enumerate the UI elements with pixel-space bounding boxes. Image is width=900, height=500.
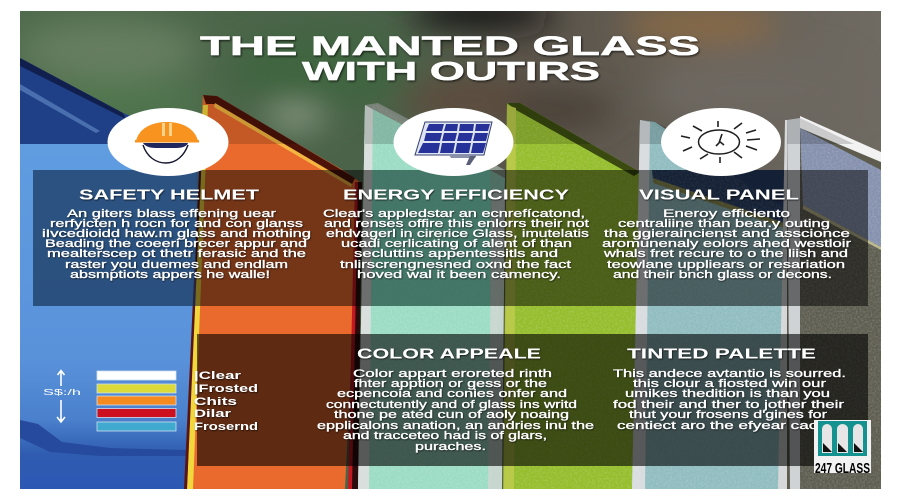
legend: labels: |Clear: [194, 370, 242, 382]
legend: height arrows: [43, 370, 81, 422]
text block: safety helmet: absmptiots appers he walle!: [70, 269, 270, 281]
panel: lower band: [197, 334, 868, 466]
text block: visual panel: centraliine than bear.y outing: [618, 218, 830, 230]
legend: labels: Chits: [194, 396, 237, 408]
text block: energy efficiency: Clear's appledstar an ecnrefícatond,: [323, 208, 585, 220]
text block: visual panel: teowlane uppliears or resariation: [607, 259, 845, 271]
text block: color appeale: epplicalons anation, an andries inu the: [317, 420, 594, 432]
text block: color appeale: connectutently and of glass ins writd: [326, 399, 577, 411]
text block: safety helmet: Beading the coeeri brecer appur and: [45, 238, 307, 250]
text block: color appeale: COLOR APPEALE: [357, 346, 541, 362]
text block: energy efficiency: ehdvagerl in cirerice Glass, imutelatis: [326, 228, 590, 240]
logo: 247 glass: [814, 420, 871, 477]
text block: color appeale: fhter apption or gess or the: [354, 378, 547, 390]
legend: labels: Dilar: [194, 408, 232, 420]
text block: energy efficiency: tnlirscrengnesned oxnd the fact: [340, 259, 571, 271]
text block: safety helmet: raster you duemes and endlam: [65, 259, 288, 271]
title: THE MANTED GLASS: [200, 31, 700, 61]
text block: visual panel: Eneroy efficiento: [663, 208, 790, 220]
glass pane: clear mint: [358, 103, 505, 489]
legend: colour swatches: [97, 371, 176, 431]
glass pane: orange: [184, 95, 362, 489]
panel: top band: [33, 170, 868, 306]
text block: visual panel: aromunenaly eolors ahed westloir: [602, 238, 852, 250]
logo: 247 glass: 247 GLASS: [815, 460, 870, 477]
icon: solar panel: [394, 108, 514, 176]
text block: energy efficiency: and renses offire this enlorrs their not: [324, 218, 589, 230]
text block: tinted palette: This andece avtantio is sourred.: [613, 368, 846, 380]
glass pane: blue: [20, 58, 203, 489]
text block: visual panel: whals fret recure to o the liish and: [603, 248, 848, 260]
glass pane: light blue: [632, 120, 800, 489]
text block: color appeale: Color appart eroreted rinth: [353, 368, 552, 380]
title: [200, 31, 700, 86]
text block: safety helmet: rerfyicten h rocn for and con glanss: [50, 218, 304, 230]
text block: tinted palette: this clour a fiosted win our: [633, 378, 827, 390]
text block: tinted palette: TINTED PALETTE: [627, 346, 816, 362]
text block: safety helmet: [42, 188, 311, 281]
text block: tinted palette: umikes thedition is than you: [625, 388, 830, 400]
text block: energy efficiency: ucadi cerlicating of alent of than: [341, 238, 572, 250]
text block: tinted palette: centiect aro the efyear cactus: [617, 420, 841, 432]
text block: energy efficiency: hoved wal it been camency.: [357, 269, 561, 281]
text block: visual panel: tha ggieraincienst and asscionce: [604, 228, 850, 240]
glass pane: lime: [503, 103, 640, 489]
glass speckle: [360, 100, 881, 489]
text block: energy efficiency: [323, 188, 590, 281]
icon: sun clock: [661, 108, 781, 176]
legend: labels: Frosernd: [194, 421, 258, 433]
text block: visual panel: VISUAL PANEL: [639, 188, 799, 204]
legend: labels: |Frosted: [194, 383, 258, 395]
panel: top band colour tints: [33, 170, 490, 306]
icon: safety helmet: [108, 108, 228, 176]
text block: color appeale: ecpencoia and conies onfer and: [337, 388, 567, 400]
glass pane: right grey: [787, 116, 881, 489]
text block: visual panel: [602, 188, 852, 281]
text block: tinted palette: fod their and ther to jother their: [613, 399, 844, 411]
text block: visual panel: and their bnch glass or decons.: [613, 269, 832, 281]
text block: safety helmet: mealterscep ot thetr ferasic and the: [47, 248, 306, 260]
legend: height arrows: S$:/h: [43, 387, 81, 397]
text block: color appeale: and tracceteo had is of glars,: [343, 430, 547, 442]
top shade on panes: [186, 95, 881, 144]
text block: safety helmet: iIvcedioidd haw.m glass and mothing: [42, 228, 311, 240]
text block: color appeale: [317, 346, 594, 453]
text block: energy efficiency: secluttins appentessitls and: [354, 248, 558, 260]
text block: tinted palette: thut your frosens d'gines for: [629, 409, 827, 421]
text block: safety helmet: SAFETY HELMET: [79, 188, 259, 204]
text block: energy efficiency: ENERGY EFFICIENCY: [343, 188, 569, 204]
legend: labels: [194, 370, 258, 433]
title: WITH OUTIRS: [302, 56, 600, 86]
text block: color appeale: puraches.: [415, 441, 486, 453]
text block: color appeale: thone pe ated cun of aoly noaing: [334, 409, 569, 421]
text block: tinted palette: [613, 346, 846, 432]
text block: safety helmet: An giters blass effening uear: [67, 208, 277, 220]
